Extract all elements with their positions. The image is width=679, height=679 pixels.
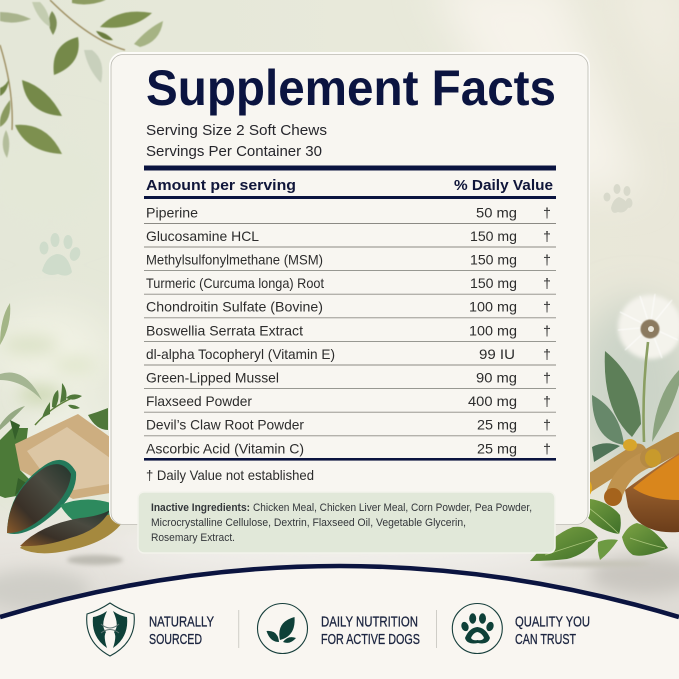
table: ingredient rows: Piperine bbox=[146, 204, 198, 220]
serving information: Serving Size 2 Soft Chews bbox=[146, 123, 327, 139]
table: ingredient rows: Flaxseed Powder bbox=[146, 393, 252, 409]
table: ingredient rows: 150 mg bbox=[470, 228, 517, 244]
panel: supplement facts card bbox=[109, 52, 590, 525]
basil leaves bbox=[530, 498, 668, 567]
icon: shield with joint bbox=[87, 603, 134, 656]
table header: % Daily Value bbox=[454, 177, 553, 194]
benefit: quality you can trust: QUALITY YOU bbox=[515, 614, 590, 630]
table: ingredient rows: 99 IU bbox=[479, 346, 515, 362]
table: ingredient rows: 150 mg bbox=[470, 252, 517, 268]
dandelion and leaves, right bbox=[592, 294, 679, 462]
table: ingredient rows: 150 mg bbox=[470, 275, 517, 291]
serving information: Servings Per Container 30 bbox=[146, 144, 322, 160]
table: ingredient rows: Ascorbic Acid (Vitamin C) bbox=[146, 440, 304, 456]
table: ingredient rows: † bbox=[543, 322, 551, 338]
callout: inactive ingredients: Microcrystalline Cellulose, Dextrin, Flaxseed Oil, Vegetable Glycerin, bbox=[151, 517, 466, 529]
table: ingredient rows: 50 mg bbox=[476, 204, 517, 220]
table: ingredient rows: 25 mg bbox=[477, 440, 517, 456]
table: ingredient rows: Devil’s Claw Root Powder bbox=[146, 417, 304, 433]
marble counter bbox=[0, 500, 679, 630]
table: ingredient rows: 25 mg bbox=[477, 417, 517, 433]
table: ingredient rows: † bbox=[543, 346, 551, 362]
icon: small paw watermark bbox=[604, 184, 632, 213]
table: ingredient rows: dl-alpha Tocopheryl (Vitamin E) bbox=[146, 346, 335, 362]
mussels bbox=[7, 460, 122, 553]
serving information bbox=[146, 123, 327, 160]
table: ingredient rows: Green-Lipped Mussel bbox=[146, 370, 279, 386]
icon: paw in circle bbox=[452, 604, 502, 654]
benefit: quality you can trust: CAN TRUST bbox=[515, 632, 576, 648]
table: ingredient rows: 90 mg bbox=[476, 370, 517, 386]
table: ingredient rows: † bbox=[543, 417, 551, 433]
table: ingredient rows: 100 mg bbox=[469, 299, 517, 315]
herb sprigs, left bbox=[0, 303, 108, 498]
table: ingredient rows: † bbox=[543, 370, 551, 386]
benefit: daily nutrition: FOR ACTIVE DOGS bbox=[321, 632, 420, 648]
benefit: naturally sourced: SOURCED bbox=[149, 632, 202, 648]
benefit: quality you can trust bbox=[515, 614, 590, 648]
table: ingredient rows: Boswellia Serrata Extract bbox=[146, 322, 303, 338]
table: ingredient rows: † bbox=[543, 275, 551, 291]
callout: inactive ingredients: Chicken Meal, Chicken Liver Meal, Corn Powder, Pea Powder, bbox=[253, 502, 532, 514]
table: ingredient rows bbox=[144, 204, 556, 461]
table: ingredient rows: 400 mg bbox=[468, 393, 517, 409]
table: ingredient rows: Glucosamine HCL bbox=[146, 228, 259, 244]
benefit: daily nutrition: DAILY NUTRITION bbox=[321, 614, 418, 630]
bottom band with navy curve bbox=[0, 566, 679, 679]
icon: large paw watermark bbox=[40, 233, 82, 276]
table: ingredient rows: † bbox=[543, 299, 551, 315]
table: ingredient rows: Methylsulfonylmethane (MSM) bbox=[146, 252, 323, 268]
table header: Amount per serving bbox=[146, 177, 296, 194]
table: ingredient rows: † bbox=[543, 393, 551, 409]
callout: inactive ingredients: Rosemary Extract. bbox=[151, 532, 235, 544]
icon: leaves in circle bbox=[258, 604, 308, 654]
benefit: naturally sourced: NATURALLY bbox=[149, 614, 214, 630]
table: ingredient rows: Turmeric (Curcuma longa) Root bbox=[146, 275, 324, 291]
benefit: naturally sourced bbox=[149, 614, 214, 648]
turmeric roots and bowl bbox=[574, 439, 679, 532]
table: ingredient rows: † bbox=[543, 204, 551, 220]
table: ingredient rows: † bbox=[543, 252, 551, 268]
benefit: daily nutrition bbox=[321, 614, 420, 648]
title: Supplement Facts bbox=[146, 60, 556, 116]
table: ingredient rows: † bbox=[543, 440, 551, 456]
flaxseed bowl bbox=[15, 414, 110, 499]
table: ingredient rows: † bbox=[543, 228, 551, 244]
table: ingredient rows: Chondroitin Sulfate (Bovine) bbox=[146, 299, 323, 315]
table: ingredient rows: 100 mg bbox=[469, 322, 517, 338]
leafy branches, top left bbox=[0, 0, 163, 158]
footnote: † Daily Value not established bbox=[146, 467, 314, 483]
callout: inactive ingredients: Inactive Ingredients: bbox=[151, 502, 250, 514]
table header bbox=[144, 166, 556, 199]
callout: inactive ingredients bbox=[138, 492, 555, 553]
